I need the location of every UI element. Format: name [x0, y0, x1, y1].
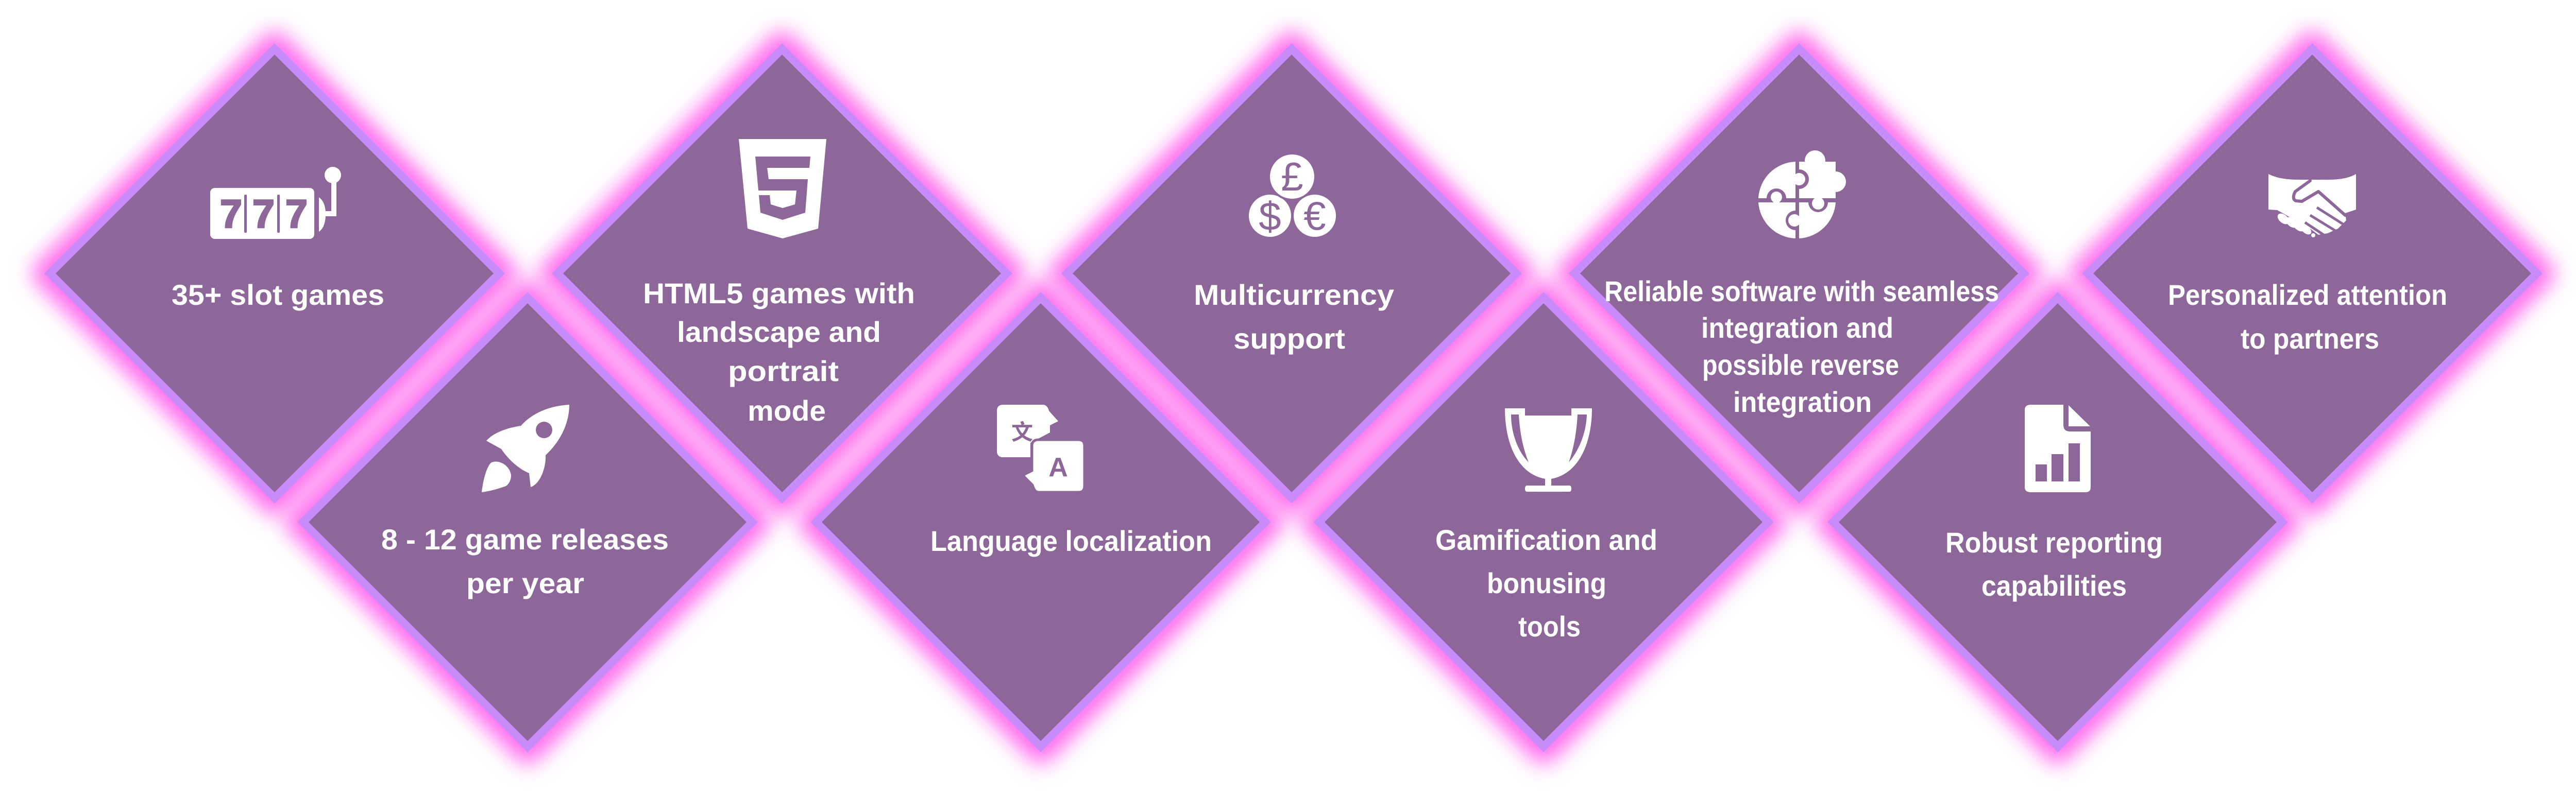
icon: slot machine	[210, 167, 341, 239]
diamond	[552, 43, 1012, 504]
label: bonusing	[1487, 567, 1606, 599]
diamond	[1313, 292, 1774, 752]
icon: HTML5 shield	[739, 139, 826, 238]
diamond	[297, 292, 758, 752]
label: capabilities	[1981, 569, 2127, 602]
label: per year	[466, 567, 584, 599]
label: Personalized attention	[2168, 279, 2447, 311]
icon: coins: £	[1281, 154, 1303, 199]
diamond	[44, 43, 505, 504]
panel: 35+ slot games	[44, 43, 505, 504]
icon: puzzle	[1758, 150, 1846, 238]
diamond	[1061, 43, 1522, 504]
icon: translate bubbles	[997, 405, 1084, 492]
label: support	[1233, 322, 1345, 355]
label	[1435, 524, 1657, 643]
label: 8 - 12 game releases	[381, 523, 669, 556]
label: integration	[1733, 386, 1872, 418]
diamond	[1569, 43, 2029, 504]
label	[2168, 279, 2447, 355]
panel: HTML5 games	[552, 43, 1012, 504]
label	[381, 523, 669, 599]
icon: translate bubbles: 文	[1011, 415, 1033, 446]
icon: slot machine: 7	[285, 192, 308, 236]
icon: translate bubbles: A	[1048, 453, 1068, 482]
icon: coins: €	[1303, 193, 1326, 238]
diamond	[2082, 43, 2543, 504]
label	[1194, 279, 1394, 355]
label: integration and	[1701, 312, 1893, 344]
icon: coins: $	[1259, 194, 1281, 239]
label: 35+ slot games	[172, 279, 384, 311]
diamond	[1827, 292, 2288, 752]
panel: reporting	[1827, 292, 2288, 752]
label: Robust reporting	[1945, 526, 2163, 559]
icon: report document	[2025, 405, 2091, 492]
label: to partners	[2241, 322, 2379, 355]
label: tools	[1518, 610, 1581, 643]
label: Gamification and	[1435, 524, 1657, 556]
icon: coins	[1249, 152, 1336, 239]
label: Reliable software with seamless	[1604, 275, 1999, 307]
icon: trophy	[1505, 408, 1592, 492]
label: landscape and	[677, 316, 881, 348]
panel: multicurrency	[1061, 43, 1522, 504]
diamond	[810, 292, 1271, 752]
label: Multicurrency	[1194, 279, 1394, 311]
panel: reliable software	[1569, 43, 2029, 504]
panel: gamification	[1313, 292, 1774, 752]
label: portrait	[728, 355, 839, 387]
icon: rocket	[482, 405, 569, 492]
label: possible reverse	[1702, 349, 1899, 381]
label	[1604, 275, 1999, 418]
icon: handshake	[2267, 174, 2356, 238]
label	[643, 277, 915, 427]
label: Language localization	[930, 525, 1212, 557]
label: mode	[748, 394, 826, 427]
panel: personalized attention	[2082, 43, 2543, 504]
panel: language localization	[810, 292, 1271, 752]
label	[1945, 526, 2163, 602]
panel: game releases	[297, 292, 758, 752]
icon: slot machine: 7	[220, 192, 242, 236]
label: HTML5 games with	[643, 277, 915, 309]
icon: slot machine: 7	[252, 192, 275, 236]
